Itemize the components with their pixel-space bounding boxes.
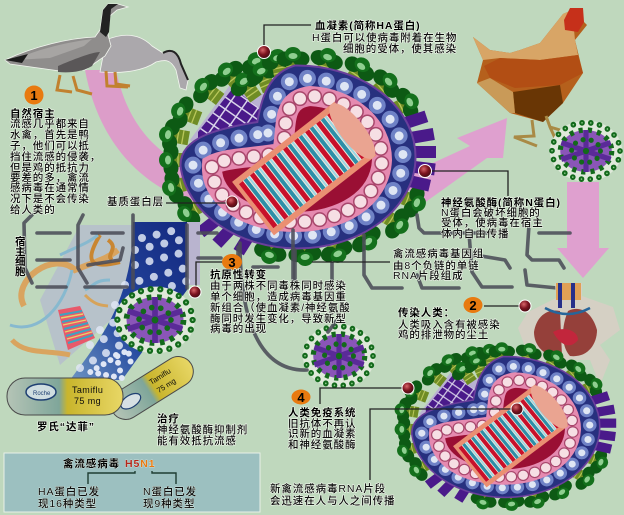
text: human immune system: 和神经氨酸酶 bbox=[288, 438, 356, 451]
text: natural host body: 挡住流感的侵袭， bbox=[10, 150, 101, 163]
capsule: Tamiflu small: 75 mg bbox=[155, 376, 178, 395]
text: gene segments: RNA片段组成 bbox=[393, 269, 463, 282]
text: new RNA: 会迅速在人与人之间传播 bbox=[270, 494, 395, 507]
badge 3 with callout: 3 bbox=[228, 255, 236, 270]
watermark bbox=[24, 215, 570, 370]
illustration: chicken bbox=[473, 8, 587, 146]
text: antigenic shift: 由于两株不同毒株同时感染 bbox=[210, 279, 347, 292]
label: host cell: 细 bbox=[15, 255, 26, 268]
text: antigenic shift bbox=[210, 268, 351, 335]
callout line: human infection bbox=[484, 300, 531, 312]
arrow: virus to chicken bbox=[400, 118, 507, 206]
text: natural host body bbox=[10, 117, 101, 216]
text: natural host body: 给人类的 bbox=[10, 203, 56, 216]
text: natural host body: 况下是不会传染 bbox=[10, 192, 90, 205]
callout line: matrix protein bbox=[166, 196, 238, 208]
text: antigenic shift: 病毒的出现 bbox=[210, 322, 267, 335]
capsule: Tamiflu small: Tamiflu bbox=[148, 366, 172, 387]
text: treatment: 能有效抵抗流感 bbox=[157, 434, 237, 447]
heading: natural host bbox=[10, 86, 56, 120]
capsule: Tamiflu large: Roche bbox=[33, 391, 51, 397]
text: human immune system: 人类免疫系统 bbox=[288, 406, 356, 419]
panel: H5N1 types bbox=[4, 453, 260, 512]
badge 4 with callout: 4 bbox=[297, 390, 305, 405]
text: antigenic shift: 抗原性转变 bbox=[210, 268, 267, 281]
text: antigenic shift: 单个细胞，造成病毒基因重 bbox=[210, 290, 347, 303]
text: human infection: 人类吸入含有被感染 bbox=[398, 318, 501, 331]
panel: H5N1 types: N蛋白已发 bbox=[143, 485, 197, 498]
panel: H5N1 types: HA蛋白已发 bbox=[38, 485, 100, 498]
text: antigenic shift: 新组合（使血凝素/神经氨酸 bbox=[210, 301, 351, 314]
callout line: gene segments bbox=[312, 261, 390, 263]
text: natural host body: 要差的多，禽流 bbox=[10, 171, 90, 184]
small virus: host cell bbox=[115, 287, 195, 353]
text: human immune system bbox=[288, 406, 356, 451]
main virus bbox=[156, 44, 436, 269]
label: host cell: 胞 bbox=[15, 265, 26, 278]
label: host cell bbox=[15, 235, 26, 278]
text: hemagglutinin bbox=[312, 19, 457, 55]
text: neuraminidase: 受体，使病毒在宿主 bbox=[441, 216, 544, 229]
text: human infection: 传染人类： bbox=[398, 306, 455, 319]
text: human immune system: 旧抗体不再认 bbox=[288, 417, 356, 430]
badge 2 bbox=[464, 297, 482, 313]
text: gene segments: 由8个负链的单链 bbox=[393, 259, 480, 272]
icon: RNA segment bbox=[58, 306, 95, 350]
text: neuraminidase bbox=[441, 196, 561, 240]
text: human infection bbox=[398, 306, 501, 341]
illustration: human torso and lungs bbox=[518, 283, 620, 385]
panel: H5N1 types: H5N1 bbox=[125, 458, 155, 470]
text: neuraminidase: N蛋白会破坏细胞的 bbox=[441, 206, 541, 219]
callout line: neuraminidase bbox=[418, 164, 508, 196]
small virus: top right bbox=[550, 121, 622, 181]
text: hemagglutinin: 细胞的受体，使其感染 bbox=[343, 42, 457, 55]
text: treatment: 治疗 bbox=[157, 412, 180, 425]
panel: host cell bbox=[10, 222, 200, 380]
illustration: geese bbox=[5, 4, 188, 94]
text: treatment bbox=[157, 412, 248, 447]
virus bottom right bbox=[392, 340, 616, 513]
badge 1: 1 bbox=[30, 88, 38, 103]
text: natural host body: 子，他们可以抵 bbox=[10, 139, 90, 152]
label: host cell: 宿 bbox=[15, 235, 26, 248]
text: human infection: 鸡的排泄物的尘土 bbox=[398, 328, 489, 341]
panel: H5N1 types: 现16种类型 bbox=[38, 497, 97, 510]
arrow: goose to virus bbox=[85, 70, 214, 208]
badge 4 with callout bbox=[292, 382, 414, 405]
capsule: Tamiflu large bbox=[7, 378, 123, 415]
capsule: Tamiflu large: 75 mg bbox=[74, 396, 101, 406]
text: treatment: 神经氨酸酶抑制剂 bbox=[157, 423, 248, 436]
badge 3 with callout bbox=[189, 254, 242, 298]
capsule: Tamiflu large: Tamiflu bbox=[72, 385, 103, 395]
text: natural host body: 流感几乎都来自 bbox=[10, 117, 90, 130]
callout line: hemagglutinin bbox=[258, 25, 311, 58]
text: new RNA: 新禽流感病毒RNA片段 bbox=[270, 482, 386, 495]
text: antigenic shift: 酶同时发生变化，导致新型 bbox=[210, 312, 347, 325]
panel: H5N1 types: 禽流感病毒 bbox=[63, 457, 120, 470]
text: hemagglutinin: 血凝素(简称HA蛋白) bbox=[315, 19, 421, 32]
text: neuraminidase: 神经氨酸酶(简称N蛋白) bbox=[441, 196, 561, 209]
arrow: chicken to human bbox=[557, 182, 609, 278]
text: hemagglutinin: H蛋白可以使病毒附着在生物 bbox=[312, 31, 457, 44]
text: gene segments: 禽流感病毒基因组 bbox=[393, 247, 484, 260]
text: neuraminidase: 体内自由传播 bbox=[441, 227, 509, 240]
text: new RNA bbox=[270, 482, 395, 507]
label: matrix protein: 基质蛋白层 bbox=[107, 195, 164, 208]
badge 2: 2 bbox=[469, 298, 477, 313]
text: natural host body: 水禽，首先是鸭 bbox=[10, 128, 90, 141]
label: Roche Tamiflu: 罗氏“达菲” bbox=[37, 420, 95, 433]
heading: natural host: 自然宿主 bbox=[10, 107, 56, 120]
small virus: antigenic shift bbox=[303, 324, 375, 388]
capsule: Tamiflu small bbox=[105, 351, 199, 425]
text: natural host body: 感病毒在通常情 bbox=[10, 181, 90, 194]
callout line: new RNA bbox=[370, 403, 523, 480]
panel: H5N1 types: 现9种类型 bbox=[143, 497, 195, 510]
text: gene segments bbox=[393, 247, 484, 282]
text: natural host body: 但是鸡的抵抗力 bbox=[10, 161, 90, 174]
text: human immune system: 识新的血凝素 bbox=[288, 427, 356, 440]
label: host cell: 主 bbox=[15, 245, 26, 258]
